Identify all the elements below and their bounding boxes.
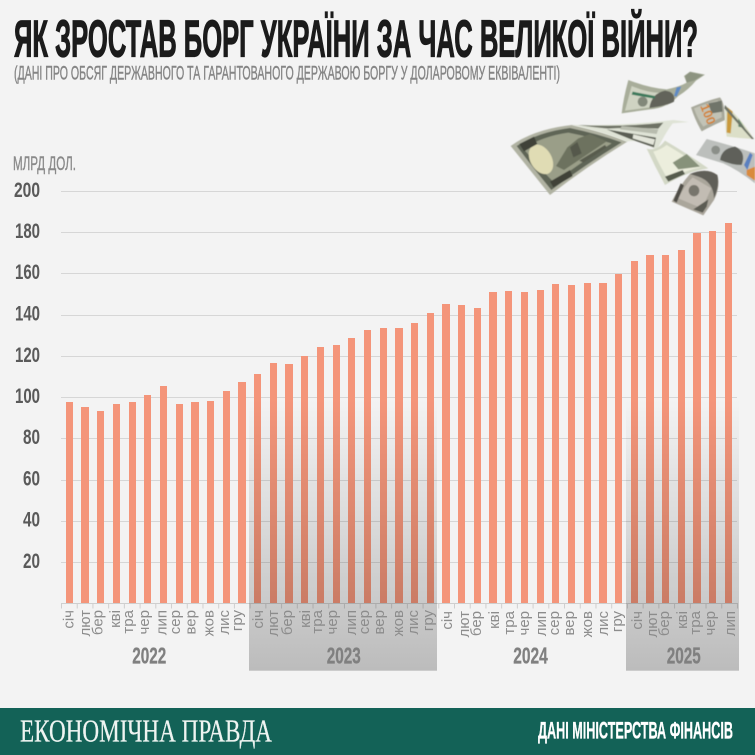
- y axis labels: 40: [23, 508, 40, 532]
- month labels 2023: лип: [343, 610, 360, 635]
- month labels 2022: січ: [60, 610, 77, 629]
- month labels 2022: лип: [154, 610, 171, 635]
- bar chart: monthly debt 2022-2025: [66, 223, 732, 603]
- month labels 2023: чер: [324, 610, 341, 634]
- month labels 2024: січ: [439, 611, 456, 630]
- month labels 2023: лют: [265, 610, 282, 637]
- bill: orange 100: 100: [697, 102, 718, 127]
- year label 2022: 2022: [132, 642, 166, 668]
- year label 2025: 2025: [667, 642, 701, 668]
- month labels 2025: січ: [629, 611, 646, 630]
- bill: side fold: [724, 105, 754, 139]
- month labels 2024: вер: [561, 611, 578, 636]
- month labels 2023: січ: [250, 610, 267, 629]
- month labels 2024: лют: [456, 611, 473, 638]
- y axis labels: 140: [15, 302, 40, 326]
- y axis labels: 200: [14, 179, 40, 202]
- footer logo: ЕКОНОМІЧНА ПРАВДА: [20, 713, 272, 749]
- month labels 2023: вер: [371, 610, 388, 634]
- month labels 2025: лют: [644, 611, 661, 638]
- month labels 2024: чер: [516, 611, 533, 636]
- y axis labels: 160: [15, 261, 40, 284]
- y axis labels: 100: [15, 385, 40, 408]
- month labels 2025: тра: [687, 610, 704, 635]
- month labels 2024: лис: [595, 611, 612, 636]
- bill: bottom curled: [672, 171, 718, 215]
- month labels 2025: чер: [702, 611, 719, 636]
- year band 2025: [626, 400, 739, 671]
- bill: curled front strip: [572, 120, 689, 151]
- bill: orange 100: [691, 97, 725, 131]
- month labels 2023: сер: [356, 610, 373, 634]
- month labels 2024: жов: [579, 611, 596, 637]
- month labels 2022: [60, 609, 246, 637]
- y axis labels: 20: [23, 550, 40, 573]
- month labels 2022: чер: [136, 610, 153, 634]
- month labels 2024: лип: [533, 611, 550, 636]
- month labels 2022: сер: [167, 610, 184, 634]
- month labels 2024: гру: [609, 611, 626, 632]
- month labels 2024: бер: [468, 611, 485, 636]
- month labels 2025: бер: [656, 611, 673, 636]
- month labels 2025: [629, 610, 739, 638]
- month labels 2023: бер: [279, 610, 296, 635]
- y axis labels: 120: [15, 344, 40, 367]
- month labels 2023: жов: [390, 610, 407, 636]
- y axis labels: 60: [23, 468, 40, 490]
- month labels 2023: гру: [420, 610, 437, 631]
- bill: large back side: [511, 125, 627, 195]
- month labels 2022: жов: [200, 610, 217, 636]
- year band 2023: [249, 400, 437, 671]
- month labels 2025: лип: [722, 611, 739, 636]
- bill: pale lower-right: [647, 141, 708, 185]
- month labels 2023: лис: [405, 610, 422, 635]
- y axis labels: 80: [23, 426, 40, 449]
- year label 2024: 2024: [513, 642, 548, 668]
- month labels 2024: тра: [501, 610, 518, 635]
- month labels 2025: кві: [674, 611, 691, 629]
- month labels 2023: [250, 609, 437, 637]
- month labels 2024: кві: [486, 611, 503, 629]
- year label 2023: 2023: [327, 642, 361, 668]
- month labels 2022: лис: [216, 610, 233, 635]
- y axis labels: 180: [15, 220, 40, 243]
- month labels 2024: [439, 610, 626, 638]
- y axis labels: [14, 179, 40, 573]
- bill: right portrait: [696, 139, 755, 183]
- month labels 2022: кві: [107, 610, 124, 628]
- month labels 2023: кві: [297, 610, 314, 628]
- footer band: [0, 708, 755, 755]
- month labels 2022: тра: [120, 609, 137, 634]
- month labels 2022: лют: [77, 610, 94, 637]
- month labels 2024: сер: [546, 611, 563, 635]
- illustration: flying dollar bills: [511, 72, 755, 215]
- month labels 2022: вер: [182, 610, 200, 634]
- month labels 2023: тра: [309, 609, 326, 634]
- bill: top portrait: [622, 72, 705, 113]
- month labels 2022: гру: [229, 610, 246, 631]
- unit label: МЛРД ДОЛ.: [13, 154, 76, 175]
- month labels 2022: бер: [90, 610, 106, 635]
